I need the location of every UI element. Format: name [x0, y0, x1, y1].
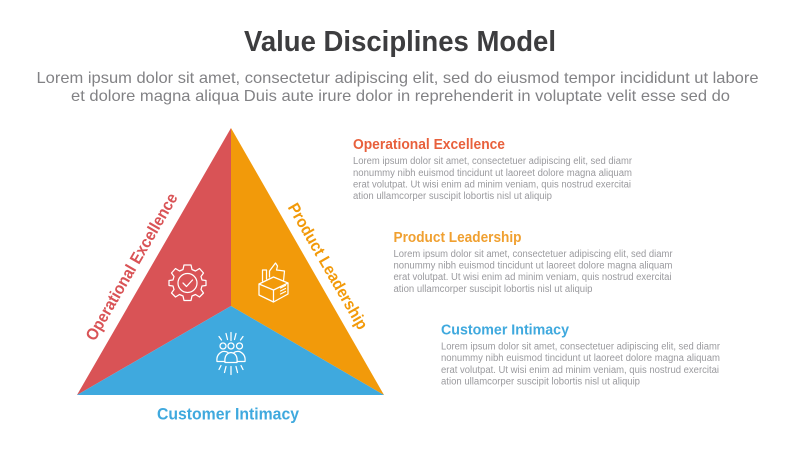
subtitle: Lorem ipsum dolor sit amet, consectetur adipiscing elit, sed do eiusmod tempor incididunt ut labore [36, 70, 759, 87]
body: ation ullamcorper suscipit lobortis nisl ut aliquip [394, 284, 593, 295]
heading: Operational Excellence [353, 137, 505, 153]
body [394, 249, 673, 295]
label: customer intimacy: Customer Intimacy [157, 406, 300, 424]
title: Value Disciplines Model [244, 26, 556, 58]
segment: operational excellence [77, 128, 231, 395]
text block: product leadership [394, 230, 673, 295]
body: erat volutpat. Ut wisi enim ad minim veniam, quis nostrud exercitai [441, 365, 719, 376]
icon: box with thumbs up [259, 263, 288, 302]
label: product leadership: Product Leadership [284, 200, 371, 333]
body [353, 156, 633, 202]
body: erat volutpat. Ut wisi enim ad minim veniam, quis nostrud exercitai [394, 272, 672, 283]
body: ation ullamcorper suscipit lobortis nisl ut aliquip [441, 376, 640, 388]
label: operational excellence: Operational Excellence [82, 190, 182, 344]
heading: Customer Intimacy [441, 322, 569, 338]
body: Lorem ipsum dolor sit amet, consectetuer adipiscing elit, sed diamr [441, 342, 721, 352]
segment: customer intimacy [77, 306, 384, 395]
body: Lorem ipsum dolor sit amet, consectetuer adipiscing elit, sed diamr [353, 156, 633, 167]
icon: team with rays [217, 332, 245, 374]
body: nonummy nibh euismod tincidunt ut laoreet dolore magna aliquam [394, 260, 672, 272]
text block: operational excellence [353, 137, 633, 202]
body [441, 342, 721, 388]
subtitle [36, 70, 759, 105]
subtitle: et dolore magna aliqua Duis aute irure dolor in reprehenderit in voluptate velit esse sed do [71, 88, 730, 105]
body: nonummy nibh euismod tincidunt ut laoreet dolore magna aliquam [441, 353, 720, 364]
body: erat volutpat. Ut wisi enim ad minim veniam, quis nostrud exercitai [353, 180, 631, 190]
segment: product leadership [231, 128, 384, 395]
text block: customer intimacy [441, 322, 721, 388]
heading: Product Leadership [394, 230, 522, 246]
body: ation ullamcorper suscipit lobortis nisl ut aliquip [353, 191, 552, 202]
icon: gear with check [169, 265, 206, 300]
triangle diagram [77, 128, 384, 395]
body: Lorem ipsum dolor sit amet, consectetuer adipiscing elit, sed diamr [394, 249, 673, 260]
body: nonummy nibh euismod tincidunt ut laoreet dolore magna aliquam [353, 168, 632, 179]
